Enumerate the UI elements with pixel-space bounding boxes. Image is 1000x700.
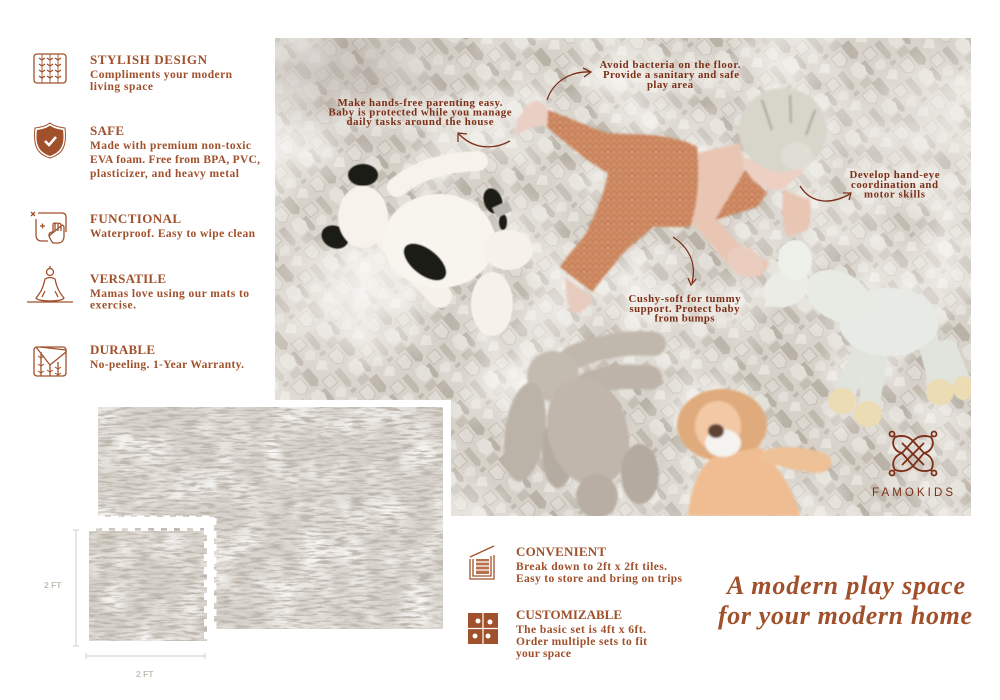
feature: customizable: Order multiple sets to fit [516, 636, 647, 648]
feature: stylish design: living space [90, 81, 153, 93]
plush dog [318, 161, 533, 336]
feature: stylish design [34, 52, 233, 93]
icon: patterned mat [34, 54, 66, 83]
baby feet [514, 100, 548, 135]
icon: person meditating [27, 266, 73, 302]
baby back and arm [687, 143, 770, 277]
arrow: to tummy caption [673, 237, 696, 285]
tile interlock notches [89, 528, 207, 641]
icon: hand wiping mat [31, 212, 66, 243]
feature: safe: Made with premium non-toxic [90, 140, 251, 152]
tagline [718, 571, 972, 630]
tagline: A modern play space [725, 571, 965, 600]
icon: shield with check [35, 123, 65, 158]
feature: durable: DURABLE [90, 342, 155, 357]
caption: tummy support: Cushy-soft for tummy [628, 293, 741, 305]
feature: versatile: exercise. [90, 300, 136, 312]
feature: durable: No-peeling. 1-Year Warranty. [90, 359, 244, 371]
caption: bacteria [600, 59, 741, 91]
brand logo [872, 432, 953, 499]
plush bunny [498, 343, 659, 518]
caption glow backgrounds [335, 60, 940, 324]
feature: convenient [470, 544, 683, 585]
baby [513, 88, 827, 313]
caption: hand-eye: Develop hand-eye [850, 169, 940, 181]
feature: functional [31, 211, 256, 243]
dimension: tile height [44, 530, 79, 646]
feature: customizable [468, 607, 647, 660]
icon: peeled mat corner [34, 347, 66, 376]
feature: safe: EVA foam. Free from BPA, PVC, [90, 154, 260, 166]
crochet horse [757, 240, 973, 427]
feature: customizable: CUSTOMIZABLE [516, 607, 622, 622]
feature: stylish design: Compliments your modern [90, 69, 233, 81]
caption: hands-free [328, 97, 512, 128]
arrow: to hands-free caption [458, 133, 510, 147]
feature: convenient: CONVENIENT [516, 544, 606, 559]
caption: bacteria: Avoid bacteria on the floor. [600, 59, 741, 71]
feature: stylish design: STYLISH DESIGN [90, 52, 208, 67]
logo wordmark: FAMOKIDS [872, 487, 953, 499]
caption: tummy support [628, 293, 741, 324]
caption: hand-eye: coordination and [851, 179, 938, 191]
caption: hand-eye [850, 170, 940, 198]
feature: customizable: The basic set is 4ft x 6ft. [516, 624, 646, 636]
caption: bacteria: play area [647, 79, 694, 91]
caption: bacteria: Provide a sanitary and safe [603, 69, 739, 81]
arrow: to bacteria caption [547, 68, 591, 100]
caption: tummy support: support. Protect baby [630, 303, 740, 315]
mat set: large assembled mat [98, 407, 443, 629]
feature: versatile [27, 266, 249, 312]
feature: customizable: your space [516, 648, 571, 660]
icon: storage box [470, 546, 494, 579]
caption: hands-free: Make hands-free parenting easy. [338, 97, 503, 109]
floor shading [250, 30, 980, 380]
plush lion [677, 389, 832, 516]
arrow: to hand-eye caption [800, 186, 851, 201]
feature: convenient: Break down to 2ft x 2ft tiles. [516, 561, 667, 573]
dimension: tile width [86, 653, 205, 679]
feature: safe [35, 123, 260, 180]
feature: versatile: Mamas love using our mats to [90, 288, 249, 300]
feature: functional: FUNCTIONAL [90, 211, 181, 226]
baby turban [739, 88, 827, 172]
mat interlock notches [98, 518, 214, 629]
caption: hands-free: Baby is protected while you manage [328, 106, 512, 118]
feature: convenient: Easy to store and bring on trips [516, 573, 683, 585]
feature: functional: Waterproof. Easy to wipe clean [90, 228, 256, 240]
caption: tummy support: from bumps [654, 312, 714, 324]
dimension: tile width: 2 FT [136, 669, 154, 679]
caption: hand-eye: motor skills [864, 188, 925, 200]
feature: versatile: VERSATILE [90, 271, 166, 286]
feature: safe: plasticizer, and heavy metal [90, 168, 239, 180]
feature: safe: SAFE [90, 123, 124, 138]
logo mark [890, 432, 936, 476]
caption: hands-free: daily tasks around the house [346, 116, 494, 128]
photo: baby playing on floor mat with plush toys [250, 30, 980, 518]
floor mat pattern [275, 38, 971, 516]
mat set: single tile [89, 528, 207, 641]
dimension: tile height: 2 FT [44, 580, 62, 590]
feature: durable [34, 342, 244, 376]
baby romper [547, 110, 698, 292]
icon: puzzle pieces [468, 613, 498, 644]
feature list [27, 52, 260, 376]
baby face [742, 157, 805, 190]
tagline: for your modern home [718, 601, 972, 630]
